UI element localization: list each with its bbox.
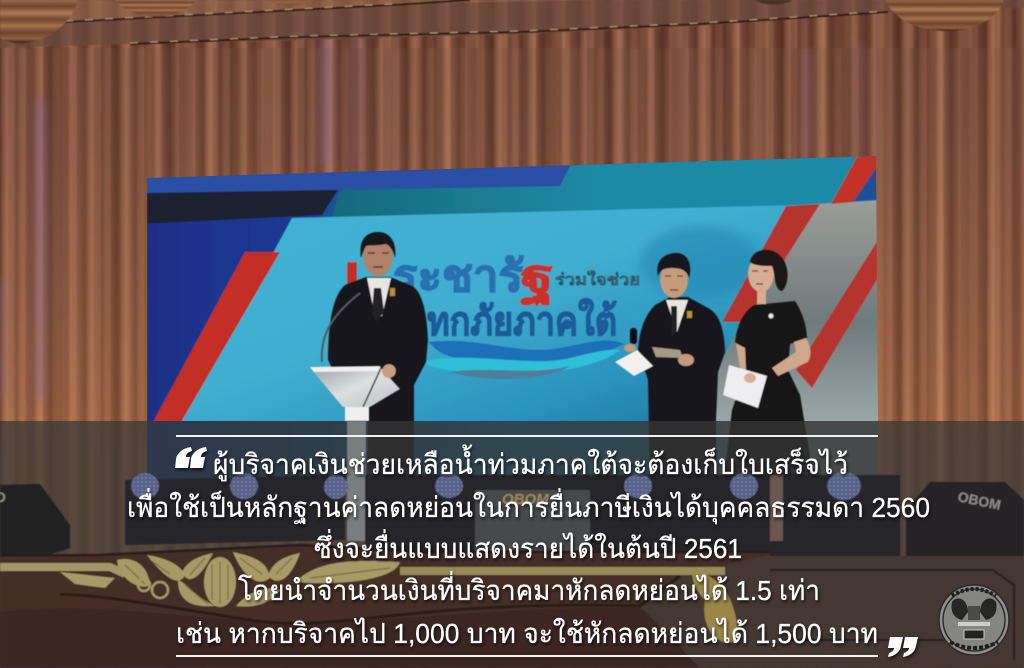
screen: logo text: ฐ	[520, 250, 554, 306]
glass lectern	[310, 364, 400, 421]
curtain valance	[0, 0, 1024, 48]
lapel pin	[390, 288, 395, 296]
ornate table with gold carving	[0, 545, 1024, 668]
lectern column seen through band	[347, 421, 366, 541]
quote text block: เช่น หากบริจาคไป 1,000 บาท จะใช้หักลดหย่อนได้ 1,500 บาท	[176, 617, 878, 649]
screen foot through caption band	[147, 421, 878, 481]
screen: water waves	[420, 341, 624, 379]
screen: darker cloud wash	[640, 226, 760, 298]
OBOM stage monitors: OBOM	[956, 488, 1002, 513]
screen: teal top band	[330, 156, 860, 222]
screen: dark band	[147, 190, 338, 224]
brooch	[768, 314, 774, 318]
screen: left red slash	[152, 252, 280, 424]
equipment row	[125, 475, 345, 545]
OBOM stage monitors	[0, 482, 1024, 556]
OBOM stage monitors: OBOM	[502, 491, 549, 508]
lower stage scene	[0, 421, 1024, 668]
icon: opening quotation mark	[175, 447, 207, 468]
bottom rule	[176, 655, 878, 657]
presenter's legs	[770, 475, 783, 541]
quote text block: ซึ่งจะยื่นแบบแสดงรายได้ในต้นปี 2561	[314, 529, 742, 564]
quote text block: เพื่อใช้เป็นหลักฐานค่าลดหย่อนในการยื่นภาษีเงินได้บุคคลธรรมดา 2560	[127, 488, 930, 525]
body: suit	[328, 277, 428, 480]
screen: logo text: ระชารั	[393, 252, 524, 301]
speaker in suit at lectern	[322, 232, 428, 480]
top rule	[176, 435, 878, 437]
screen: navy left area	[147, 215, 322, 424]
icon: closing quotation mark	[888, 637, 918, 657]
hand on lectern	[382, 364, 396, 378]
screen: blue strip	[147, 166, 570, 193]
screen: logo text: ทกภัยภาคใต้	[427, 298, 617, 344]
screen: main cyan panel	[180, 205, 800, 424]
microphone and script cards	[630, 328, 637, 344]
quote text block: โดยนำจำนวนเงินที่บริจาคมาหักลดหย่อนได้ 1.5 เท่า	[238, 571, 820, 606]
script cards	[723, 365, 767, 408]
stage lights	[131, 472, 861, 500]
LED screen	[147, 150, 882, 430]
quote text block	[127, 444, 930, 649]
dark translucent caption band	[0, 421, 1024, 668]
screen: logo text: ร่วมใจช่วย	[555, 270, 640, 289]
quote text block: ผู้บริจาคเงินช่วยเหลือน้ำท่วมภาคใต้จะต้องเก็บใบเสร็จไว้	[213, 444, 848, 482]
screen: right red slashes	[722, 156, 878, 388]
government seal	[939, 585, 1009, 655]
curtain swags	[0, 0, 1004, 43]
screen: logo text	[346, 254, 640, 337]
head	[363, 236, 393, 276]
screen: storm cloud panel	[715, 200, 878, 421]
female presenter	[723, 250, 814, 480]
microphone stem	[322, 293, 360, 362]
male presenter	[615, 253, 725, 480]
shirt and tie	[367, 278, 391, 316]
